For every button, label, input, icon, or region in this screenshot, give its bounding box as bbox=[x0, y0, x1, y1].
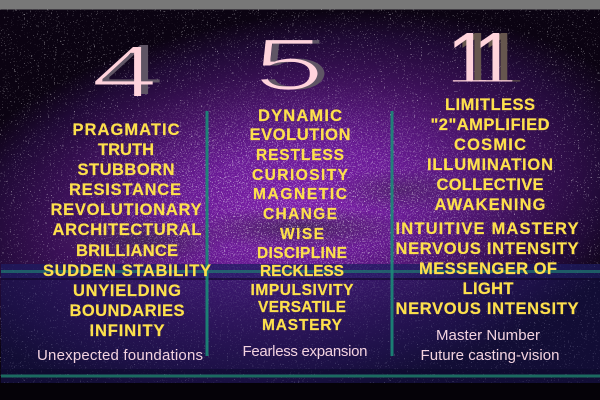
column: 4 caption: Unexpected foundations bbox=[37, 347, 203, 364]
column: 4 keywords: ARCHITECTURAL bbox=[52, 221, 202, 239]
column: 4 keywords: TRUTH bbox=[98, 141, 154, 159]
column: 5 keywords: CHANGE bbox=[263, 206, 337, 223]
column: 4 keywords: REVOLUTIONARY bbox=[50, 201, 202, 219]
column: 5 keywords: DISCIPLINE bbox=[257, 245, 347, 262]
column: 4 keywords: RESISTANCE bbox=[69, 181, 181, 199]
column: 5 keywords: CURIOSITY bbox=[252, 167, 349, 184]
number 4: 4 bbox=[98, 29, 165, 111]
number 11: 11 bbox=[447, 17, 513, 103]
column: 11 keywords: AWAKENING bbox=[434, 196, 546, 214]
column: 11 caption bbox=[420, 327, 560, 364]
column: 11 keywords: LIMITLESS bbox=[445, 96, 535, 114]
column: 11 keywords: INTUITIVE MASTERY bbox=[396, 220, 578, 238]
column: 11 keywords: COLLECTIVE bbox=[436, 176, 544, 194]
column: 4 keywords: SUDDEN STABILITY bbox=[43, 262, 211, 280]
column: 11 keywords bbox=[396, 96, 578, 318]
top grey band bbox=[0, 0, 600, 10]
column: 11 keywords: MESSENGER OF bbox=[419, 260, 557, 278]
number 11: 11 bbox=[455, 17, 521, 103]
column: 5 keywords bbox=[250, 107, 354, 334]
column: 5 keywords: DYNAMIC bbox=[258, 107, 342, 125]
column: 5 keywords: MAGNETIC bbox=[253, 186, 347, 203]
column: 4 keywords: BRILLIANCE bbox=[76, 242, 178, 260]
column: 11 keywords: COSMIC bbox=[454, 136, 526, 154]
lower navy panel bbox=[0, 264, 600, 400]
column: 11 caption: Master Number bbox=[436, 327, 540, 344]
number 5: 5 bbox=[260, 24, 332, 106]
column: 5 keywords: IMPULSIVITY bbox=[250, 282, 354, 299]
column: 4 keywords: INFINITY bbox=[90, 322, 164, 340]
column: 4 keywords bbox=[43, 121, 211, 340]
column: 5 keywords: EVOLUTION bbox=[250, 126, 350, 144]
column: 11 keywords: "2"AMPLIFIED bbox=[430, 116, 550, 134]
column: 4 keywords: PRAGMATIC bbox=[72, 121, 180, 139]
column: 5 caption: Fearless expansion bbox=[242, 343, 368, 360]
column: 4 keywords: BOUNDARIES bbox=[70, 302, 184, 320]
column: 5 keywords: VERSATILE bbox=[258, 299, 346, 316]
column: 4 keywords: UNYIELDING bbox=[73, 282, 181, 300]
column: 5 keywords: RESTLESS bbox=[256, 147, 344, 164]
number 5: 5 bbox=[253, 24, 325, 106]
column: 4 keywords: STUBBORN bbox=[78, 161, 174, 179]
number 11 bbox=[452, 33, 520, 82]
column: 11 caption: Future casting-vision bbox=[420, 347, 560, 364]
column: 11 keywords: LIGHT bbox=[462, 280, 514, 298]
divider: right bbox=[390, 111, 394, 356]
column: 5 keywords: MASTERY bbox=[262, 317, 343, 334]
column: 5 keywords: RECKLESS bbox=[260, 263, 344, 280]
column: 5 keywords: WISE bbox=[280, 226, 324, 243]
column: 11 keywords: NERVOUS INTENSITY bbox=[396, 300, 578, 318]
column: 11 keywords: NERVOUS INTENSITY bbox=[396, 240, 578, 258]
number 4: 4 bbox=[91, 31, 158, 113]
column: 11 keywords: ILLUMINATION bbox=[427, 156, 553, 174]
divider: left bbox=[206, 111, 208, 356]
